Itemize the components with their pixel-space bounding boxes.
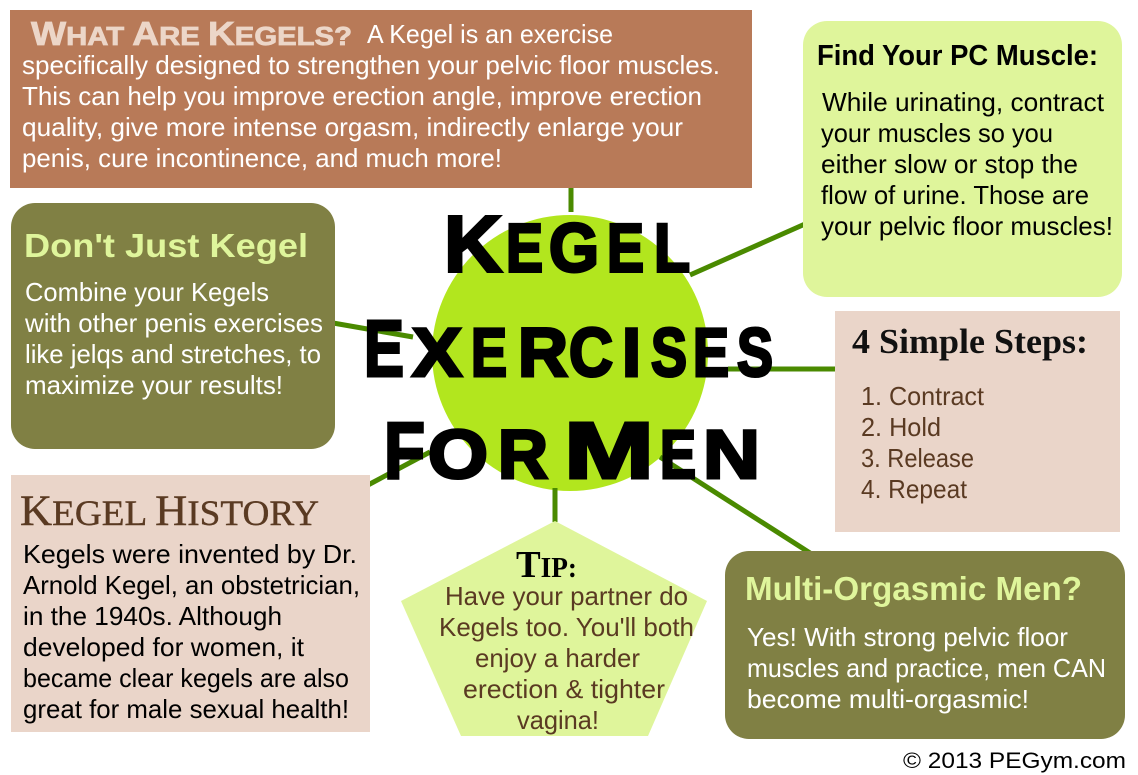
panel: find your PC muscle [803, 21, 1122, 297]
steps list: 4. Repeat [861, 474, 968, 504]
panel: what are kegels [10, 10, 752, 188]
panel: tip pentagon [401, 521, 707, 736]
title: M [564, 406, 654, 495]
title: C [569, 314, 613, 391]
title: L [654, 210, 690, 286]
text block: multi-orgasmic men [747, 622, 1106, 714]
heading: kegel history: KEGEL HISTORY [20, 488, 319, 535]
title: E [471, 314, 507, 391]
heading: what are kegels: WHAT ARE KEGELS? [31, 15, 352, 52]
text block: find your PC muscle: either slow or stop the [821, 149, 1078, 179]
title: R [518, 314, 568, 391]
text block: tip: enjoy a harder [475, 643, 640, 673]
text block: don't just kegel: Combine your Kegels [25, 277, 269, 307]
text block: don't just kegel [24, 277, 323, 400]
steps list: 1. Contract [861, 381, 985, 411]
text block: multi-orgasmic men: Yes! With strong pelvic floor [747, 622, 1068, 652]
title: R [498, 416, 548, 493]
title: N [703, 416, 760, 493]
copyright: © 2013 PEGym.com [903, 748, 1126, 773]
text block: find your PC muscle: your muscles so you [821, 118, 1053, 148]
central circle [432, 215, 708, 491]
text block: what are kegels: specifically designed to strengthen your pelvic floor muscles. [22, 50, 720, 80]
text block: find your PC muscle [821, 87, 1113, 241]
text block: kegel history: Arnold Kegel, an obstetrician, [23, 570, 360, 600]
heading: find your PC muscle: Find Your PC Muscle: [817, 40, 1098, 72]
heading: multi-orgasmic men: Multi-Orgasmic Men? [745, 570, 1082, 607]
text block: tip [439, 581, 694, 735]
heading: 4 simple steps: 4 Simple Steps: [852, 322, 1088, 361]
title: O [428, 416, 488, 493]
text block: kegel history: became clear kegels are also [23, 663, 349, 693]
text block: kegel history: great for male sexual health! [23, 694, 349, 724]
text block: kegel history: Kegels were invented by Dr. [23, 539, 357, 569]
text block: tip: erection & tighter [463, 674, 665, 704]
text block: kegel history [23, 539, 360, 724]
title [364, 200, 773, 495]
text block: don't just kegel: like jelqs and stretches, to [25, 339, 321, 369]
title: G [549, 210, 599, 286]
text block: find your PC muscle: your pelvic floor muscles! [821, 211, 1113, 241]
steps list [861, 381, 985, 504]
text block: what are kegels: This can help you improve erection angle, improve erection [22, 81, 702, 111]
title: S [737, 314, 773, 391]
text block: multi-orgasmic men: muscles and practice, men CAN [747, 653, 1106, 683]
heading: don't just kegel: Don't Just Kegel [24, 227, 308, 264]
title: E [506, 210, 543, 286]
title: K [444, 200, 502, 288]
text block: kegel history: developed for women, it [23, 632, 305, 662]
title: F [384, 406, 425, 495]
panel: multi-orgasmic men [725, 551, 1125, 739]
text block: what are kegels: penis, cure incontinence, and much more! [22, 143, 502, 173]
text block: what are kegels: quality, give more intense orgasm, indirectly enlarge your [22, 112, 683, 142]
text block: multi-orgasmic men: become multi-orgasmic! [747, 684, 1029, 714]
text block: find your PC muscle: flow of urine. Those are [821, 180, 1089, 210]
steps list: 2. Hold [861, 412, 941, 442]
text block: kegel history: in the 1940s. Although [23, 601, 282, 631]
text block: tip: Kegels too. You'll both [439, 612, 694, 642]
panel: don't just kegel [11, 203, 335, 449]
text block: what are kegels [22, 19, 720, 173]
text block: find your PC muscle: While urinating, contract [822, 87, 1105, 117]
text block: don't just kegel: maximize your results! [25, 370, 283, 400]
heading: tip: TIP: [516, 544, 577, 586]
title: I [622, 314, 641, 391]
title: E [364, 304, 404, 393]
title: E [660, 416, 696, 493]
title: X [412, 314, 462, 391]
text block: what are kegels: A Kegel is an exercise [367, 19, 613, 49]
text block: tip: vagina! [517, 705, 599, 735]
panel: kegel history [11, 475, 370, 732]
text block: tip: Have your partner do [445, 581, 688, 611]
title: S [651, 314, 687, 391]
panel: 4 simple steps [835, 311, 1120, 532]
title: E [607, 210, 644, 286]
steps list: 3. Release [861, 443, 974, 473]
text block: don't just kegel: with other penis exercises [24, 308, 323, 338]
connector lines [333, 185, 836, 553]
title: E [693, 314, 729, 391]
